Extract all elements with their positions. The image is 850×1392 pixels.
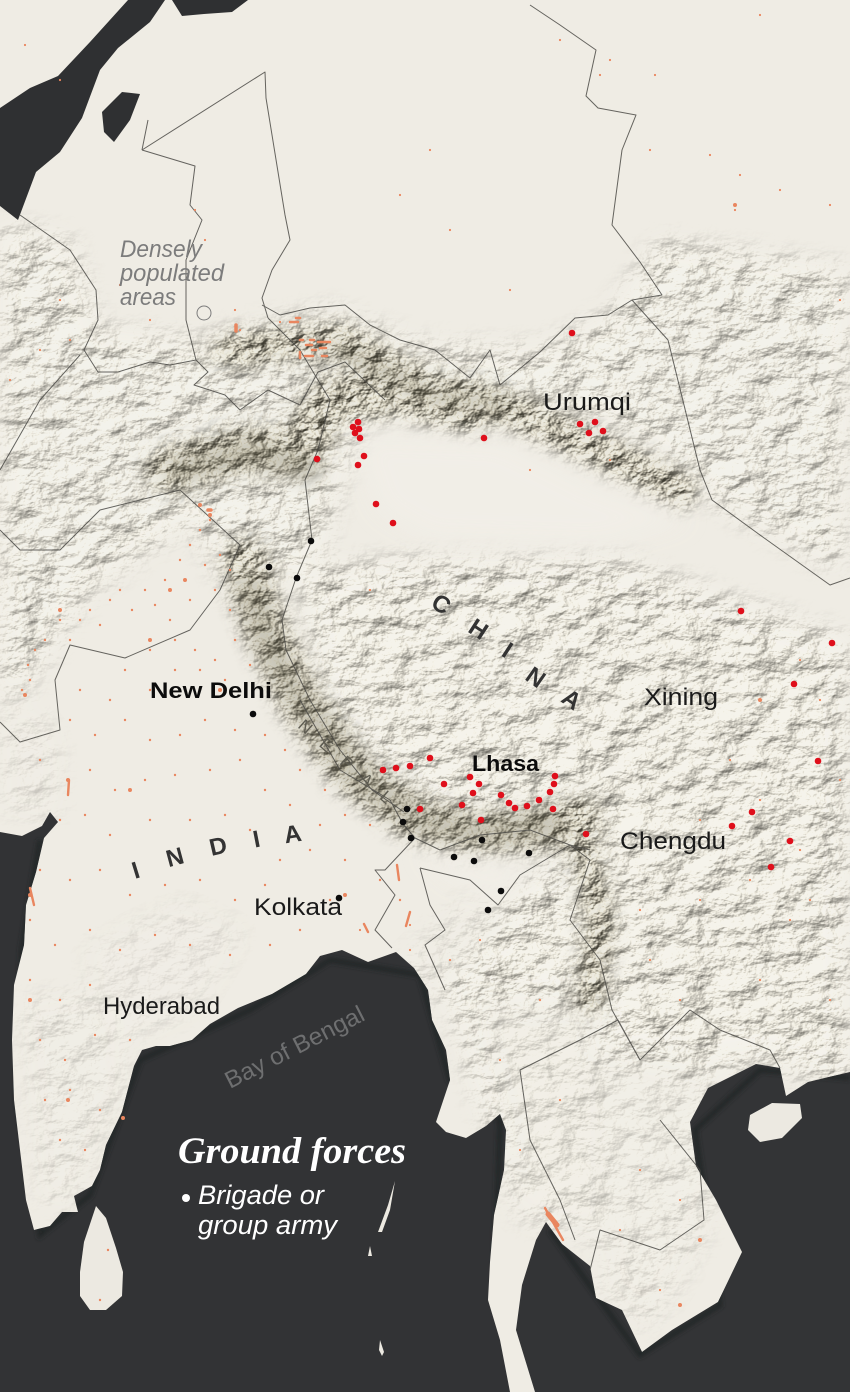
country label: China: C (426, 589, 455, 621)
country label: China: N (520, 662, 550, 694)
islands: Sri Lanka, Hainan, Andaman (80, 1103, 802, 1356)
legend: Ground forces (178, 1131, 406, 1240)
label: densely populated areas: Densely (120, 236, 204, 263)
city labels: Urumqi (543, 389, 631, 416)
capital labels (150, 678, 540, 776)
black markers: Indian brigades (250, 538, 532, 913)
country label: India: D (207, 832, 230, 862)
country label: China: A (556, 684, 586, 716)
city labels: Hyderabad (103, 993, 220, 1020)
capital labels: New Delhi (150, 678, 272, 703)
flat basins (355, 435, 690, 895)
capital labels: Lhasa (472, 751, 540, 776)
city labels: Chengdu (620, 828, 726, 855)
sea label: Bay of Bengal: Bay of Bengal (220, 1001, 369, 1094)
red markers: Chinese brigades (314, 330, 835, 870)
country label: China: I (497, 638, 517, 664)
country label: India: I (129, 857, 143, 885)
country label: India: A (282, 820, 304, 849)
country label: China (426, 589, 586, 716)
legend bullet (182, 1194, 190, 1202)
legend item text: group army (198, 1210, 339, 1240)
country label: Nepal: NEPAL (294, 716, 396, 807)
country label: India: N (163, 842, 187, 873)
city labels: Xining (644, 684, 718, 711)
legend item text: Brigade or (198, 1180, 325, 1210)
legend title: Ground forces (178, 1131, 406, 1172)
label: densely populated areas (119, 236, 225, 320)
city labels: Kolkata (254, 894, 343, 921)
sea: Bay of Bengal and South China Sea (0, 812, 850, 1392)
label: densely populated areas: areas (120, 284, 176, 311)
label: densely populated areas: populated (119, 260, 225, 287)
country label: China: H (463, 614, 493, 646)
country label: India: I (251, 826, 262, 854)
sea: Caspian (0, 0, 248, 220)
city labels (103, 389, 726, 1020)
country label: India (129, 820, 304, 885)
terrain: plateau and mountain relief (0, 217, 850, 1328)
legend item text (198, 1180, 339, 1240)
